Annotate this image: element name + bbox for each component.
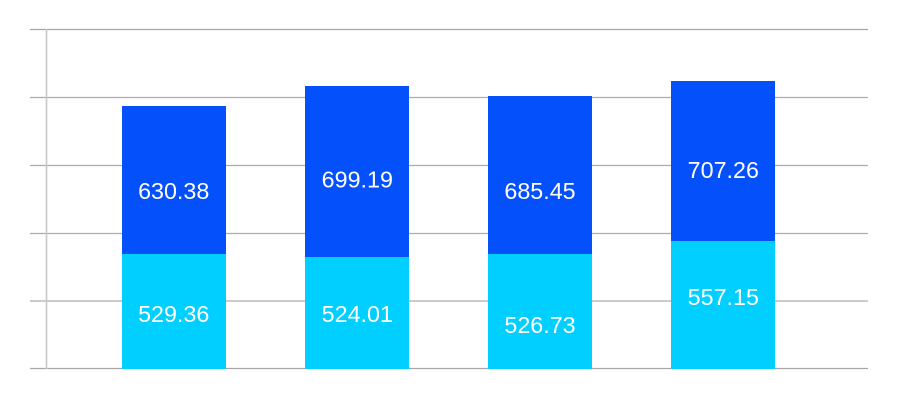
bar 3: 685.45 — [504, 178, 576, 204]
bar 1 — [122, 106, 226, 369]
bar 2 — [305, 86, 409, 369]
bar 3: 526.73 — [504, 312, 576, 338]
bar 2: 699.19 — [322, 166, 393, 192]
bar 1: 529.36 — [138, 301, 209, 327]
bar 4: 557.15 — [688, 284, 759, 310]
bar 1: 630.38 — [138, 178, 209, 204]
bar 4: 707.26 — [688, 157, 759, 183]
bar 4 — [671, 81, 775, 369]
bar 3 — [488, 96, 592, 369]
bar 2: 524.01 — [322, 301, 393, 327]
